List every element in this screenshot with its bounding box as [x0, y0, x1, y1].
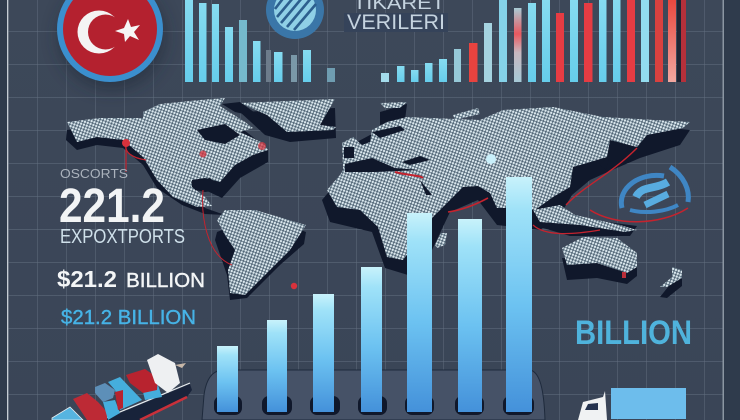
icon: striped emblem	[266, 0, 324, 39]
icon: blue globe emblem	[621, 167, 688, 212]
icon: cargo ship	[52, 354, 192, 420]
text: exports caption: EXPOXTPORTS	[60, 226, 185, 248]
platform base	[202, 370, 545, 420]
map: Greenland	[240, 99, 336, 132]
text: exports label: OSCORTS	[60, 166, 128, 181]
text: white billion value: $21.2	[57, 266, 117, 292]
bar 2	[267, 320, 287, 412]
icon: delivery truck	[578, 388, 686, 420]
bar sockets	[214, 396, 534, 415]
map: Madagascar	[435, 233, 447, 248]
map: Arctic island	[380, 102, 407, 108]
title: Ticaret Verileri: VERILERI	[347, 11, 445, 34]
map: New Zealand	[660, 267, 682, 287]
icon: Turkish flag badge	[57, 0, 166, 90]
map: North America	[67, 98, 268, 207]
bar chart: top trade bars	[185, 0, 686, 82]
world map	[66, 98, 690, 300]
text: white billion value: BILLION	[126, 270, 205, 292]
bar 1	[217, 346, 238, 412]
map: water cut-outs	[191, 102, 610, 195]
map: Eurasia and Africa	[327, 107, 690, 260]
map: Indonesia	[533, 205, 637, 232]
bar 7	[506, 177, 532, 412]
bar 5	[407, 213, 432, 412]
text: white billion value	[57, 266, 205, 292]
map: red location markers	[122, 139, 626, 289]
bar 3	[313, 294, 334, 412]
bar 6	[458, 219, 482, 412]
text: billion label: BILLION	[575, 314, 692, 352]
map: South America	[217, 210, 306, 295]
map: red trade routes	[126, 144, 688, 265]
map: Arctic islands	[453, 108, 480, 120]
map: glowing hub	[486, 154, 496, 164]
title: Ticaret Verileri	[344, 0, 448, 34]
bar 4	[361, 267, 382, 412]
map: Australia	[562, 237, 637, 273]
bar chart: rising blue bars	[214, 177, 534, 415]
text: export figure: 221.2	[59, 180, 165, 233]
text: blue billion value: $21.2 BILLION	[61, 307, 196, 329]
map: land shadows	[66, 104, 690, 300]
